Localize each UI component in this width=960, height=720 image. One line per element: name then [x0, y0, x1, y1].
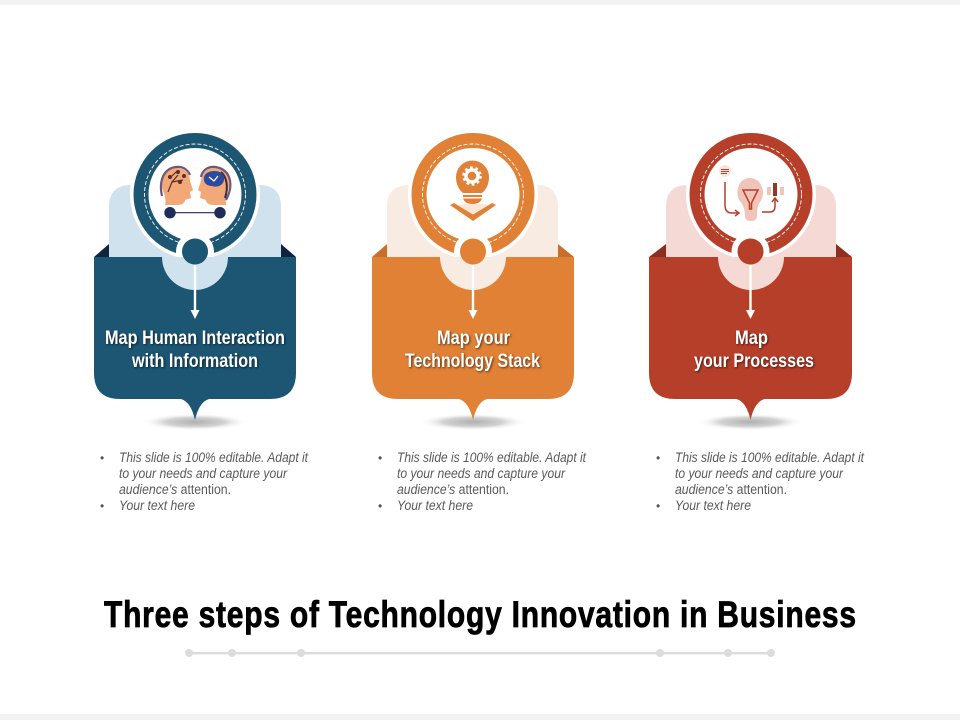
card shadow	[141, 414, 249, 430]
card shadow	[696, 414, 804, 430]
panel: map processes	[649, 130, 852, 430]
text block: panel 1 bullets	[100, 450, 309, 513]
label: Map Human Interaction	[105, 327, 285, 349]
back flap corners	[372, 244, 574, 257]
text block: panel 3 bullets: to your needs and capture your	[675, 466, 843, 481]
icon: two heads	[161, 167, 230, 205]
connector node	[440, 232, 506, 290]
text block: panel 2 bullets: This slide is 100% editable. Adapt it	[397, 450, 587, 465]
text block: panel 1 bullets: •	[100, 499, 104, 513]
label	[694, 327, 814, 372]
text block: panel 1 bullets: to your needs and capture your	[119, 466, 287, 481]
text block: panel 1 bullets: audience’s attention.	[119, 482, 231, 497]
back flap corners	[649, 244, 852, 257]
title: Three steps of Technology Innovation in Business	[104, 594, 856, 636]
label: Map	[735, 327, 768, 349]
text block: panel 1 bullets: Your text here	[119, 498, 195, 513]
back flap corners	[94, 244, 296, 257]
text block: panel 3 bullets: •	[656, 499, 660, 513]
light tab	[109, 185, 281, 257]
panel: map human interaction	[94, 130, 296, 430]
text block: panel 2 bullets: Your text here	[397, 498, 473, 513]
card body with pointer	[94, 257, 296, 420]
label: Map your	[437, 327, 510, 349]
icon: process bulb	[719, 165, 784, 221]
icon: gear bulb	[456, 160, 489, 204]
light tab	[666, 185, 836, 257]
card body with pointer	[649, 257, 852, 420]
icon: open book chevron	[450, 203, 496, 221]
connector node	[718, 232, 784, 290]
text block: panel 2 bullets: to your needs and capture your	[397, 466, 565, 481]
ring	[686, 130, 816, 260]
arrow	[746, 265, 755, 319]
title underline with dots	[185, 649, 775, 657]
arrow	[190, 265, 200, 319]
label: Technology Stack	[405, 350, 540, 372]
panel: map technology stack	[372, 130, 574, 430]
text block: panel 2 bullets: audience’s attention.	[397, 482, 509, 497]
arrow	[468, 265, 478, 319]
label: with Information	[131, 350, 258, 372]
ring	[130, 130, 260, 260]
text block: panel 1 bullets: This slide is 100% editable. Adapt it	[119, 450, 309, 465]
label	[105, 327, 285, 372]
text block: panel 3 bullets	[656, 450, 865, 513]
text block: panel 2 bullets	[378, 450, 587, 513]
label	[405, 327, 540, 372]
text block: panel 3 bullets: audience’s attention.	[675, 482, 787, 497]
text block: panel 3 bullets: •	[656, 451, 660, 465]
icon: connector dumbbell	[164, 207, 226, 218]
text block: panel 2 bullets: •	[378, 499, 382, 513]
light tab	[387, 185, 558, 257]
ring	[408, 130, 538, 260]
text block: panel 3 bullets: This slide is 100% editable. Adapt it	[675, 450, 865, 465]
text block: panel 1 bullets: •	[100, 451, 104, 465]
card body with pointer	[372, 257, 574, 420]
label: your Processes	[694, 350, 814, 372]
text block: panel 2 bullets: •	[378, 451, 382, 465]
connector node	[162, 232, 228, 290]
card shadow	[419, 414, 527, 430]
text block: panel 3 bullets: Your text here	[675, 498, 751, 513]
